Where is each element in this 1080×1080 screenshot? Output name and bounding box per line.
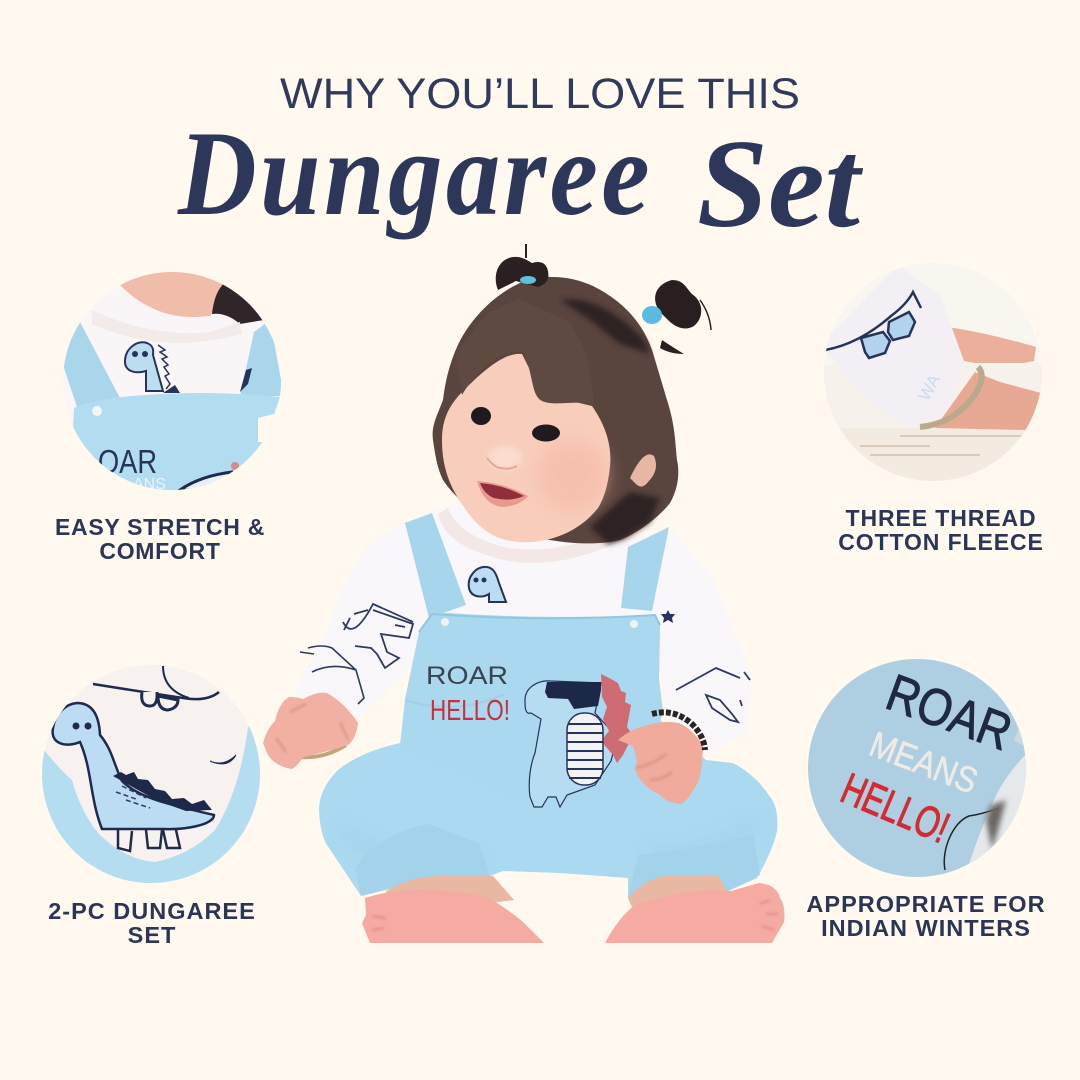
white top bbox=[294, 505, 753, 760]
caption: 2-pc dungaree set bbox=[48, 898, 256, 948]
hair ties bbox=[520, 276, 536, 284]
photo circle: neck and bib detail: OAR bbox=[98, 443, 157, 480]
title: dungaree set: Set bbox=[697, 115, 864, 254]
photo circle: roar means hello embroidery: ROAR bbox=[879, 664, 1019, 762]
left foot bbox=[362, 890, 544, 943]
title: dungaree set: Dungaree bbox=[177, 106, 650, 240]
right hand fingers bbox=[636, 754, 672, 780]
eyes bbox=[471, 407, 491, 425]
photo circle: roar means hello embroidery bbox=[806, 657, 1032, 885]
left shin bbox=[385, 876, 514, 910]
photo circle: roar means hello embroidery: HELLO! bbox=[834, 764, 956, 853]
right shin bbox=[628, 876, 728, 912]
photo circle: neck and bib detail: ANS bbox=[133, 476, 166, 493]
star bbox=[661, 610, 675, 623]
caption: easy stretch and comfort: COMFORT bbox=[99, 538, 221, 564]
hair back bbox=[433, 277, 678, 543]
cheek shading bbox=[536, 439, 608, 511]
caption: appropriate for indian winters: APPROPRIATE FOR bbox=[806, 891, 1046, 917]
photo circle: roar means hello embroidery: MEANS bbox=[864, 723, 983, 802]
collar bbox=[438, 508, 634, 563]
dark part bbox=[560, 299, 650, 354]
crocodile print bbox=[343, 604, 413, 668]
title: dungaree set bbox=[177, 106, 864, 254]
pigtail left bbox=[496, 257, 548, 290]
heading: why you'll love this: WHY YOU’LL LOVE THIS bbox=[280, 70, 800, 118]
mouth bbox=[477, 481, 528, 507]
left arm prints bbox=[300, 646, 364, 704]
photo circle: sleeve cuff and hand bbox=[820, 260, 1046, 484]
right arm prints bbox=[676, 668, 750, 722]
baby figure bbox=[263, 244, 784, 943]
caption: 2-pc dungaree set: 2-PC DUNGAREE bbox=[48, 898, 256, 924]
photo circle: sleeve cuff and hand: WA bbox=[915, 371, 944, 404]
photo circle: dinosaur print bbox=[40, 664, 264, 890]
caption: three thread cotton fleece: COTTON FLEECE bbox=[838, 529, 1044, 555]
caption: 2-pc dungaree set: SET bbox=[128, 922, 176, 948]
bib snaps bbox=[441, 618, 449, 626]
straps bbox=[405, 513, 466, 618]
left cuff bbox=[355, 824, 490, 896]
dark hair nape bbox=[590, 492, 660, 544]
bib bbox=[400, 612, 663, 800]
right hand bbox=[618, 722, 703, 804]
shirt dino bbox=[469, 567, 506, 602]
ear bbox=[630, 454, 656, 487]
right foot bbox=[605, 883, 784, 943]
caption: easy stretch and comfort bbox=[55, 514, 265, 564]
bib dinosaur bbox=[525, 674, 633, 807]
left hand fingers bbox=[276, 704, 348, 752]
legs bbox=[319, 720, 777, 898]
face bbox=[442, 354, 610, 542]
fringe bbox=[456, 299, 594, 405]
toes bbox=[372, 900, 778, 930]
bib text bbox=[426, 662, 510, 727]
pigtail right bbox=[655, 280, 701, 354]
caption: appropriate for indian winters bbox=[806, 891, 1046, 941]
caption: easy stretch and comfort: EASY STRETCH & bbox=[55, 514, 265, 540]
nose bbox=[488, 446, 522, 470]
left hand bbox=[263, 693, 358, 769]
photo circle: neck and bib detail bbox=[60, 270, 286, 494]
left bracelet bbox=[300, 745, 346, 757]
caption: three thread cotton fleece bbox=[838, 505, 1044, 555]
right cuff bbox=[628, 834, 760, 898]
bib text: HELLO! bbox=[430, 695, 510, 727]
caption: three thread cotton fleece: THREE THREAD bbox=[846, 505, 1036, 531]
bib text: ROAR bbox=[426, 662, 508, 690]
caption: appropriate for indian winters: INDIAN WINTERS bbox=[821, 915, 1031, 941]
leg shading bbox=[340, 820, 760, 862]
bracelet bbox=[652, 712, 705, 750]
